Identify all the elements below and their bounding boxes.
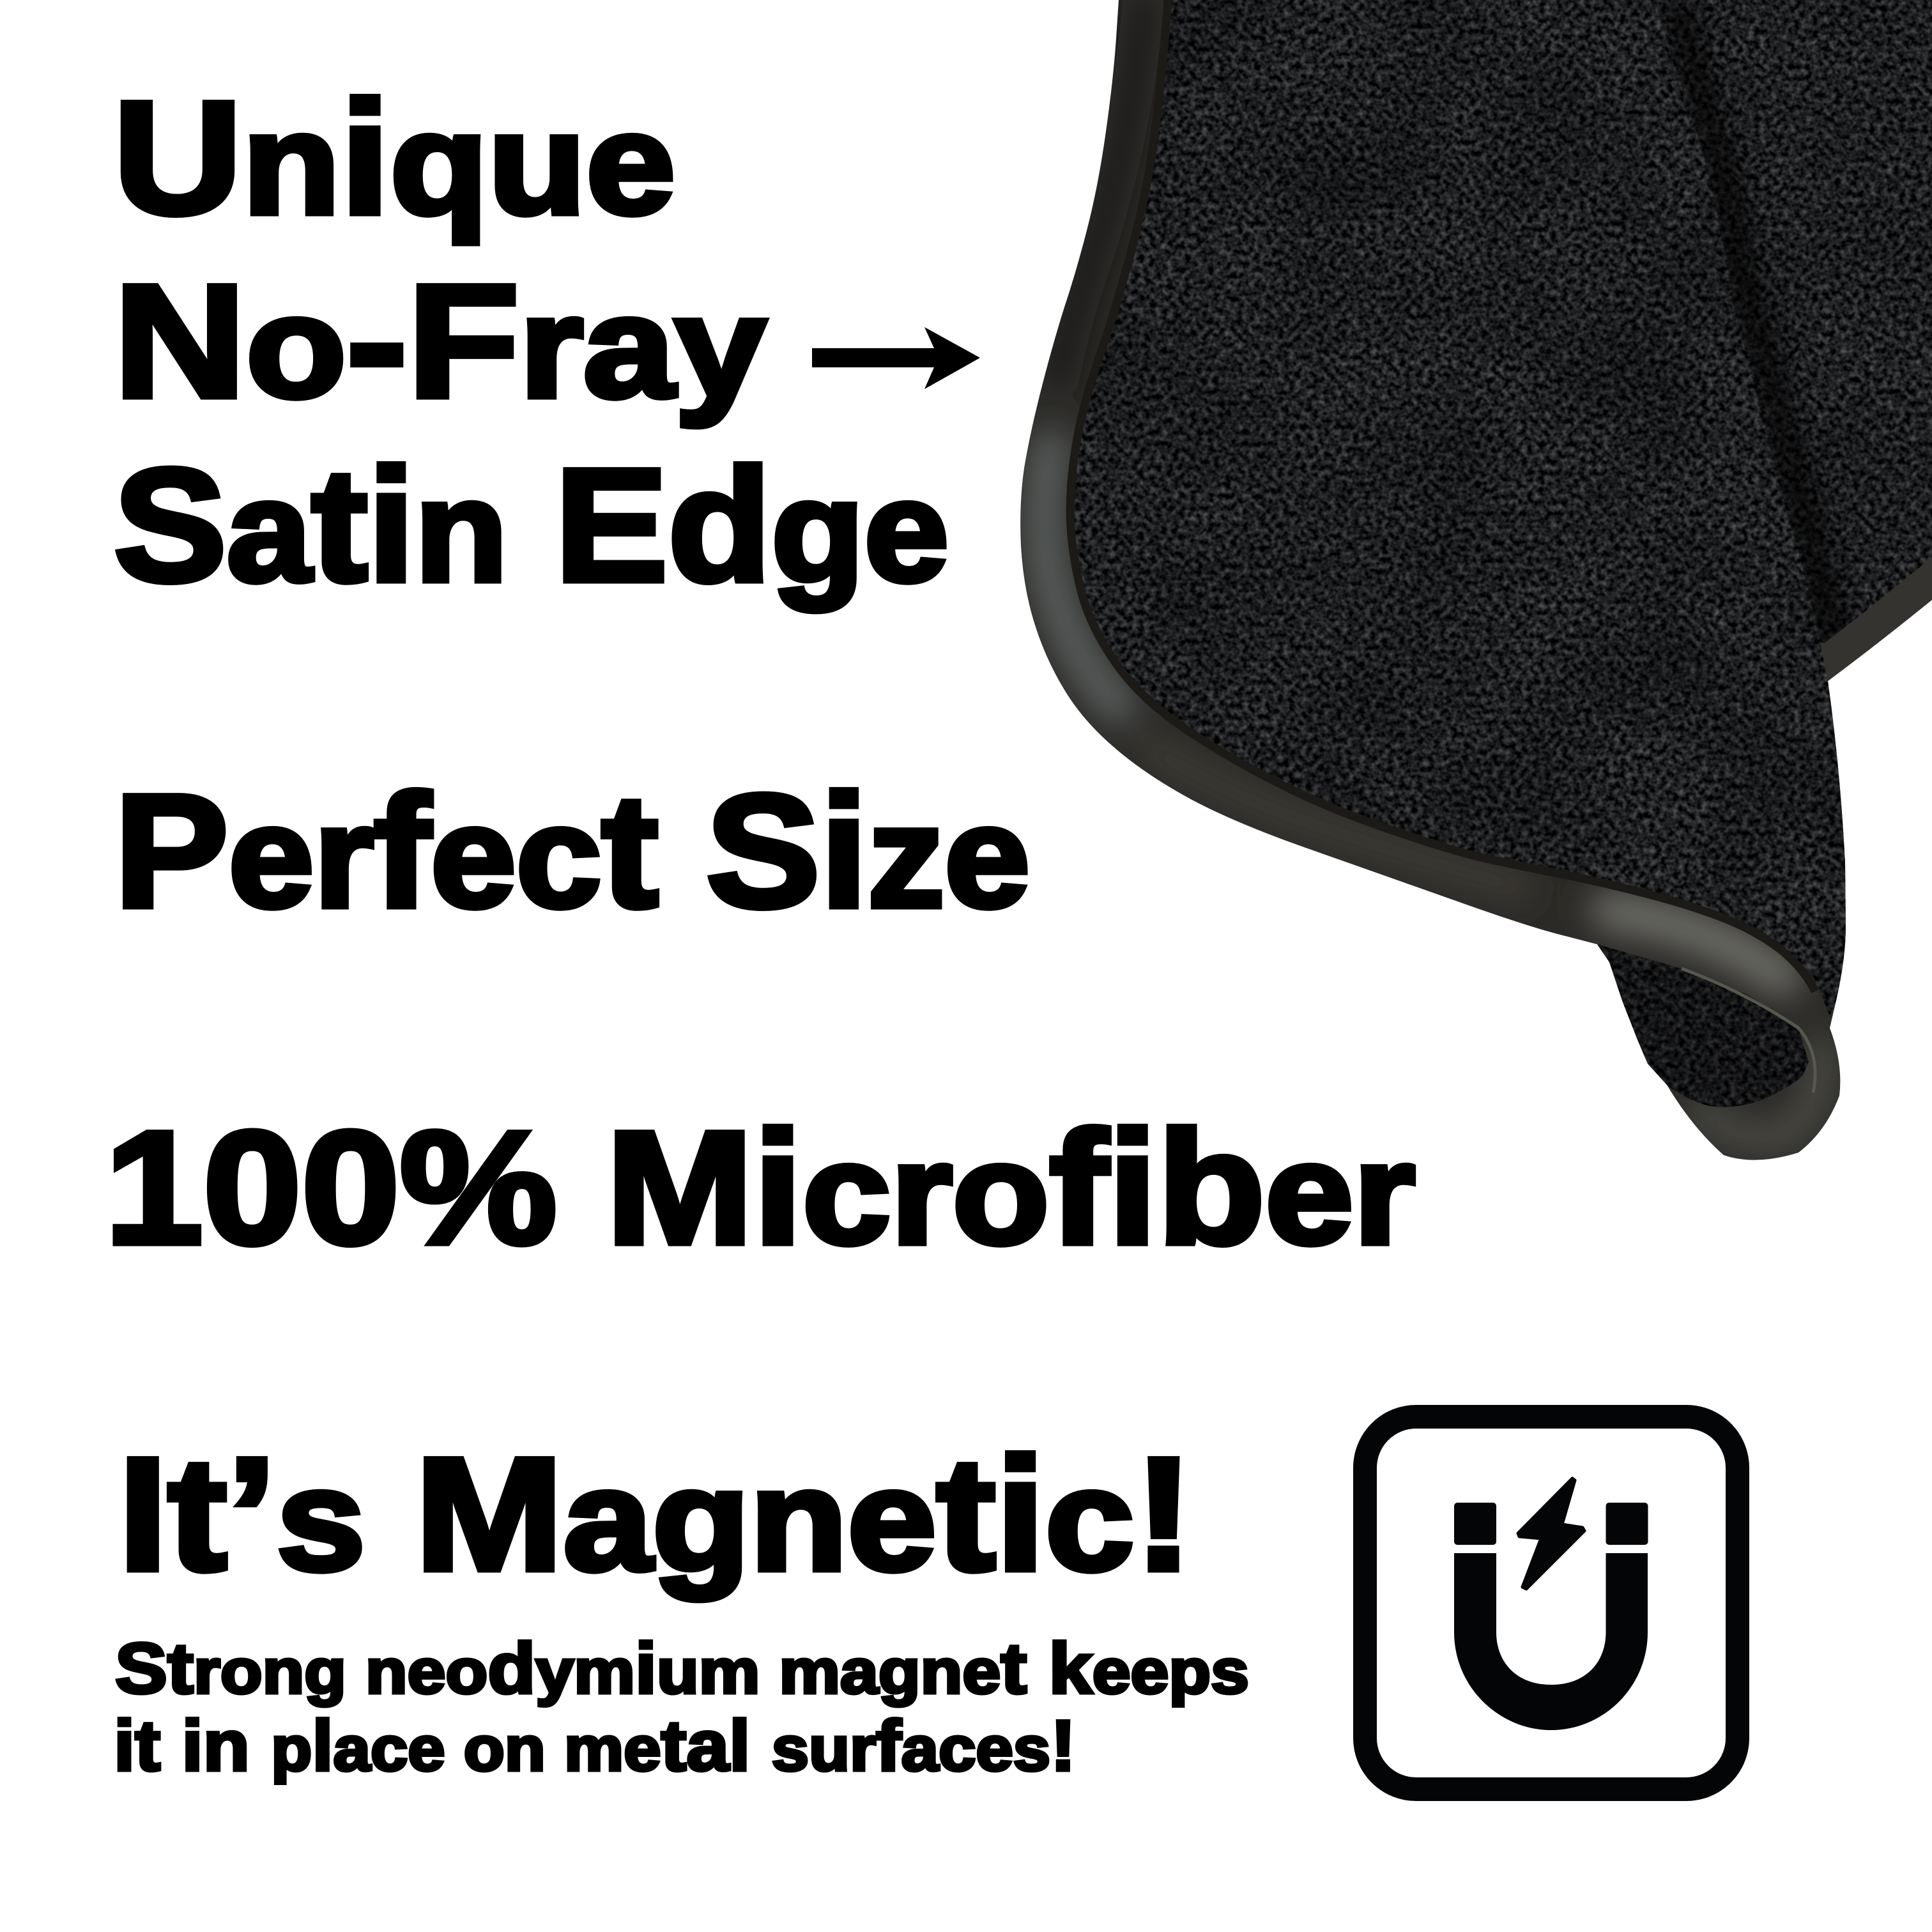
- arrow pointing to towel edge: [812, 327, 980, 389]
- heading: No-Fray: No-Fray: [114, 252, 766, 431]
- heading: Perfect Size: Perfect Size: [114, 762, 1030, 941]
- heading: Satin Edge: Satin Edge: [114, 436, 949, 615]
- towel back layer fabric: [1648, 0, 1932, 681]
- heading: Unique: Unique: [113, 68, 675, 248]
- satin fold edge line over the loop: [1682, 969, 1815, 1092]
- magnet right pole: [1606, 1503, 1648, 1545]
- lightning bolt: [1518, 1478, 1584, 1589]
- towel satin binding silhouette: [1020, 0, 1846, 1160]
- satin sheen highlights: [1044, 0, 1821, 1138]
- line 2: it in place on me tal surfaces!: [114, 1706, 1076, 1786]
- icon: magnet with lightning bolt in rounded square: [1365, 1417, 1738, 1789]
- heading: It's Magnetic!: It’s Magnetic!: [118, 1425, 1193, 1604]
- magnet body: [1454, 1553, 1648, 1730]
- photo: black microfiber towel with satin edge: [1020, 0, 1932, 1160]
- towel back layer satin edge: [1776, 543, 1932, 681]
- main fabric flap: [1067, 0, 1853, 1022]
- loop of fabric on the towel's reverse side: [1597, 944, 1809, 1107]
- icon frame: [1365, 1417, 1738, 1789]
- body text: magnet description: [114, 1629, 1249, 1786]
- main fabric stitched seam: [1075, 0, 1819, 990]
- magnet left pole: [1454, 1503, 1496, 1545]
- line 1: Strong neo dymium magne t keeps: [115, 1629, 1249, 1708]
- heading: 100% Microfiber: 100% Mi crofiber: [105, 1098, 1415, 1278]
